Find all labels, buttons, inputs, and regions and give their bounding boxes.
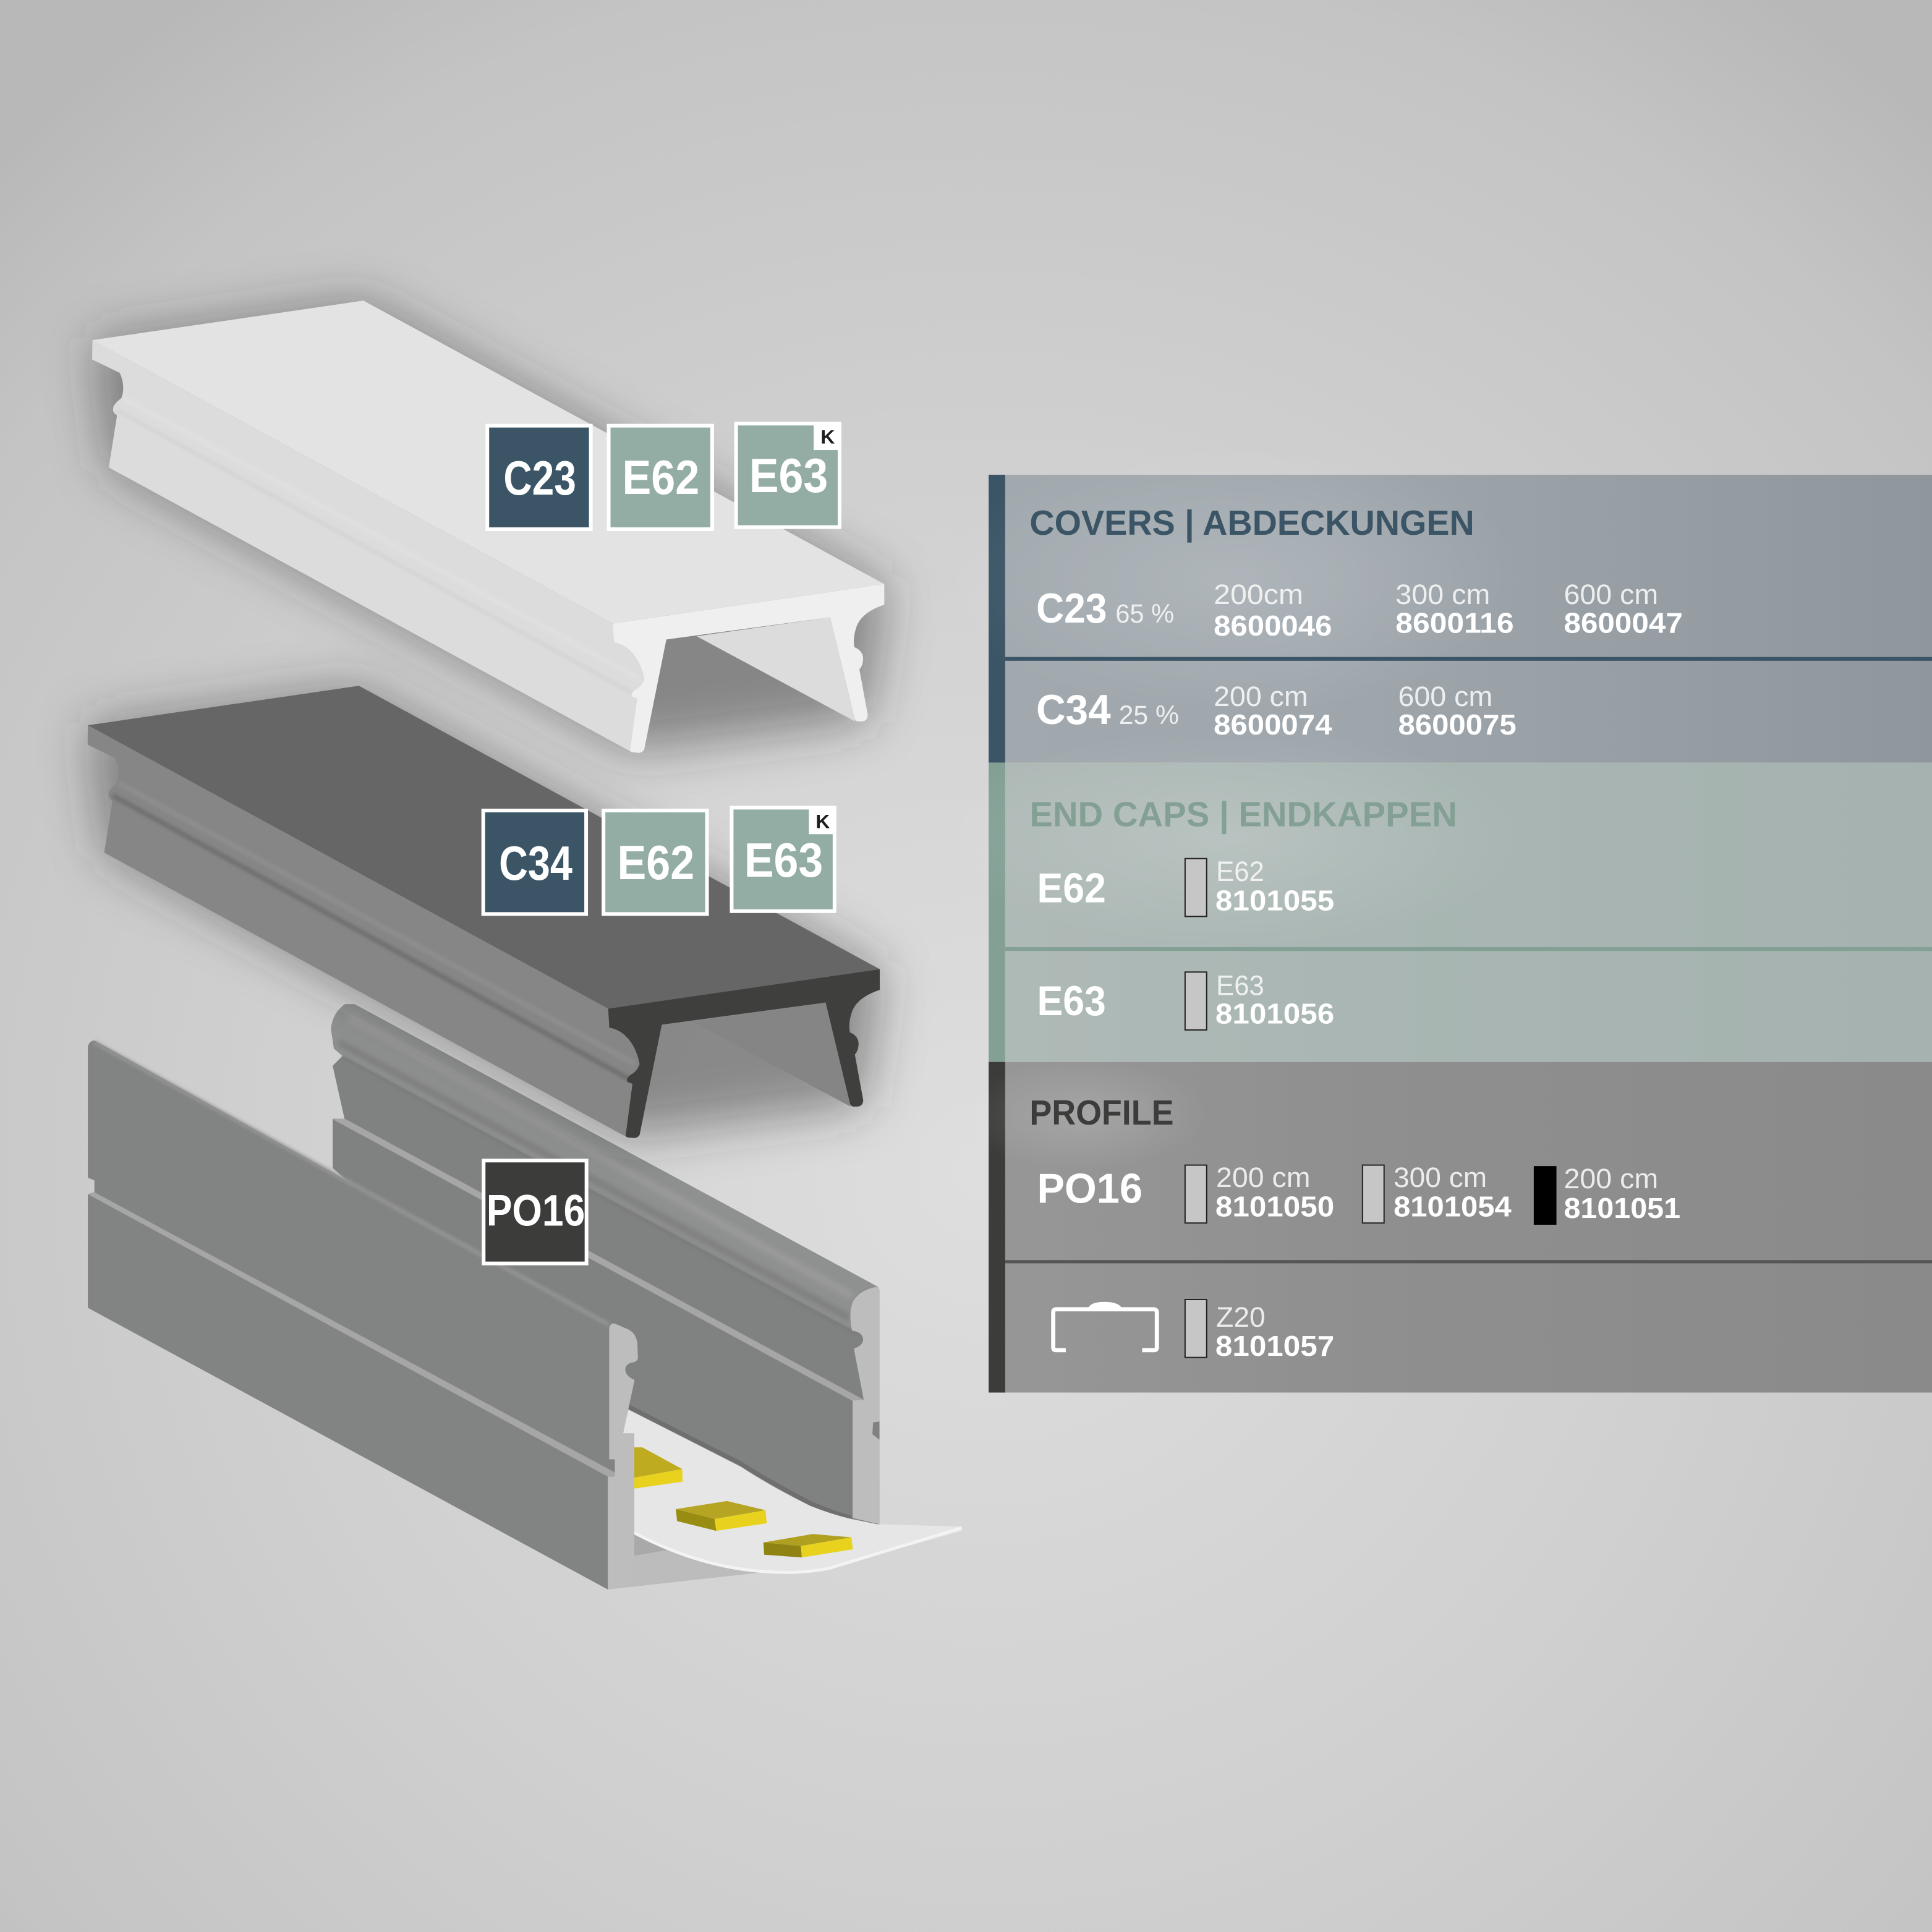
badge: E63 K (C34): E63: [744, 834, 823, 887]
white cover end face: [613, 584, 884, 753]
row: C34: 25 %: [1119, 700, 1179, 730]
row: E63: E63: [1037, 978, 1106, 1024]
row: C23: 600 cm: [1564, 579, 1658, 610]
row: C23: 65 %: [1115, 599, 1174, 629]
row: PO16: 8101051: [1564, 1192, 1680, 1224]
badge: E62 (C23): [609, 426, 712, 529]
badge: E63 K (C34): [731, 806, 836, 911]
row: C23: 8600116: [1395, 606, 1514, 639]
badge: E63 K (C23): K: [820, 425, 835, 448]
row: PO16: [1037, 1162, 1680, 1225]
inner corner: [634, 1534, 672, 1556]
white cover inner face: [697, 617, 855, 721]
row: C23: C23: [1036, 585, 1107, 632]
badge: PO16: PO16: [487, 1186, 585, 1236]
badge: E62 (C34): [603, 811, 707, 914]
dark cover shadow: [88, 686, 880, 1137]
row: C34: 8600074: [1214, 709, 1332, 741]
row: C23: 200cm: [1214, 579, 1303, 610]
row: PO16: 8101050: [1215, 1190, 1334, 1222]
panel: covers: [937, 443, 1932, 763]
row: Z20 clip: 8101057: [1215, 1330, 1334, 1362]
left post end face: [608, 1323, 638, 1589]
row: PO16: 200 cm: [1564, 1163, 1658, 1194]
dark cover side face: [88, 725, 640, 1136]
illustration: white cover C23: [92, 300, 884, 753]
badge: E62 (C23): E62: [622, 451, 699, 504]
profile front wall: [88, 1040, 615, 1589]
badge: C23: [487, 426, 591, 529]
row: PO16: 8101054: [1394, 1190, 1512, 1222]
heading: profile: PROFILE: [1029, 1093, 1174, 1133]
row: Z20 clip: Z20: [1216, 1301, 1266, 1333]
row: PO16: 200 cm: [1216, 1162, 1311, 1193]
row: C23: 8600047: [1564, 606, 1683, 639]
badge: C34: [483, 811, 586, 914]
row: E62: E62: [1216, 856, 1264, 887]
row: E62: 8101055: [1215, 884, 1334, 916]
LED chips: [634, 1447, 853, 1557]
profile far wall: [331, 1004, 880, 1528]
badge: C23: C23: [503, 452, 576, 505]
illustration: aluminium profile PO16: [88, 1004, 961, 1589]
badge: PO16: [483, 1160, 587, 1264]
icon: mounting clip: [1053, 1302, 1157, 1350]
row: PO16: PO16: [1037, 1166, 1143, 1212]
row: C34: [1036, 681, 1517, 741]
illustration: dark cover C34: [88, 686, 880, 1138]
dark cover inner face: [692, 1002, 851, 1107]
row: E63: 8101056: [1215, 998, 1334, 1030]
badge: C34: C34: [499, 837, 572, 890]
LED strip: [622, 1406, 961, 1573]
row: C23: 8600046: [1214, 610, 1332, 642]
heading: covers: COVERS | ABDECKUNGEN: [1029, 503, 1475, 543]
row: C34: 200 cm: [1214, 681, 1308, 712]
row: E62: [1037, 856, 1334, 916]
panel: end caps: [937, 727, 1932, 1062]
row: E62: E62: [1037, 865, 1106, 911]
dark cover top face: [88, 686, 880, 1008]
white cover shadow: [92, 300, 884, 752]
right post end face: [850, 1287, 880, 1524]
row: E63: [1037, 970, 1334, 1030]
row: Z20 clip: [1053, 1300, 1334, 1362]
badge: E63 K (C23): E63: [749, 449, 828, 503]
row: C34: 8600075: [1398, 709, 1517, 741]
row: E63: E63: [1216, 970, 1264, 1002]
white cover side face: [92, 340, 644, 751]
badge: E62 (C34): E62: [617, 836, 694, 890]
row: C34: 600 cm: [1398, 681, 1492, 712]
badge: E63 K (C34): K: [815, 810, 830, 832]
row: C23: [1036, 579, 1683, 642]
dark cover end face: [608, 969, 880, 1138]
row: PO16: 300 cm: [1394, 1162, 1487, 1193]
profile base: [608, 1549, 764, 1589]
heading: end caps: END CAPS | ENDKAPPEN: [1029, 795, 1457, 835]
white cover top face: [92, 300, 884, 623]
badge: E63 K (C23): [736, 422, 841, 527]
row: C23: 300 cm: [1395, 579, 1490, 610]
panel: profile: [961, 1060, 1932, 1392]
row: C34: C34: [1036, 687, 1111, 733]
